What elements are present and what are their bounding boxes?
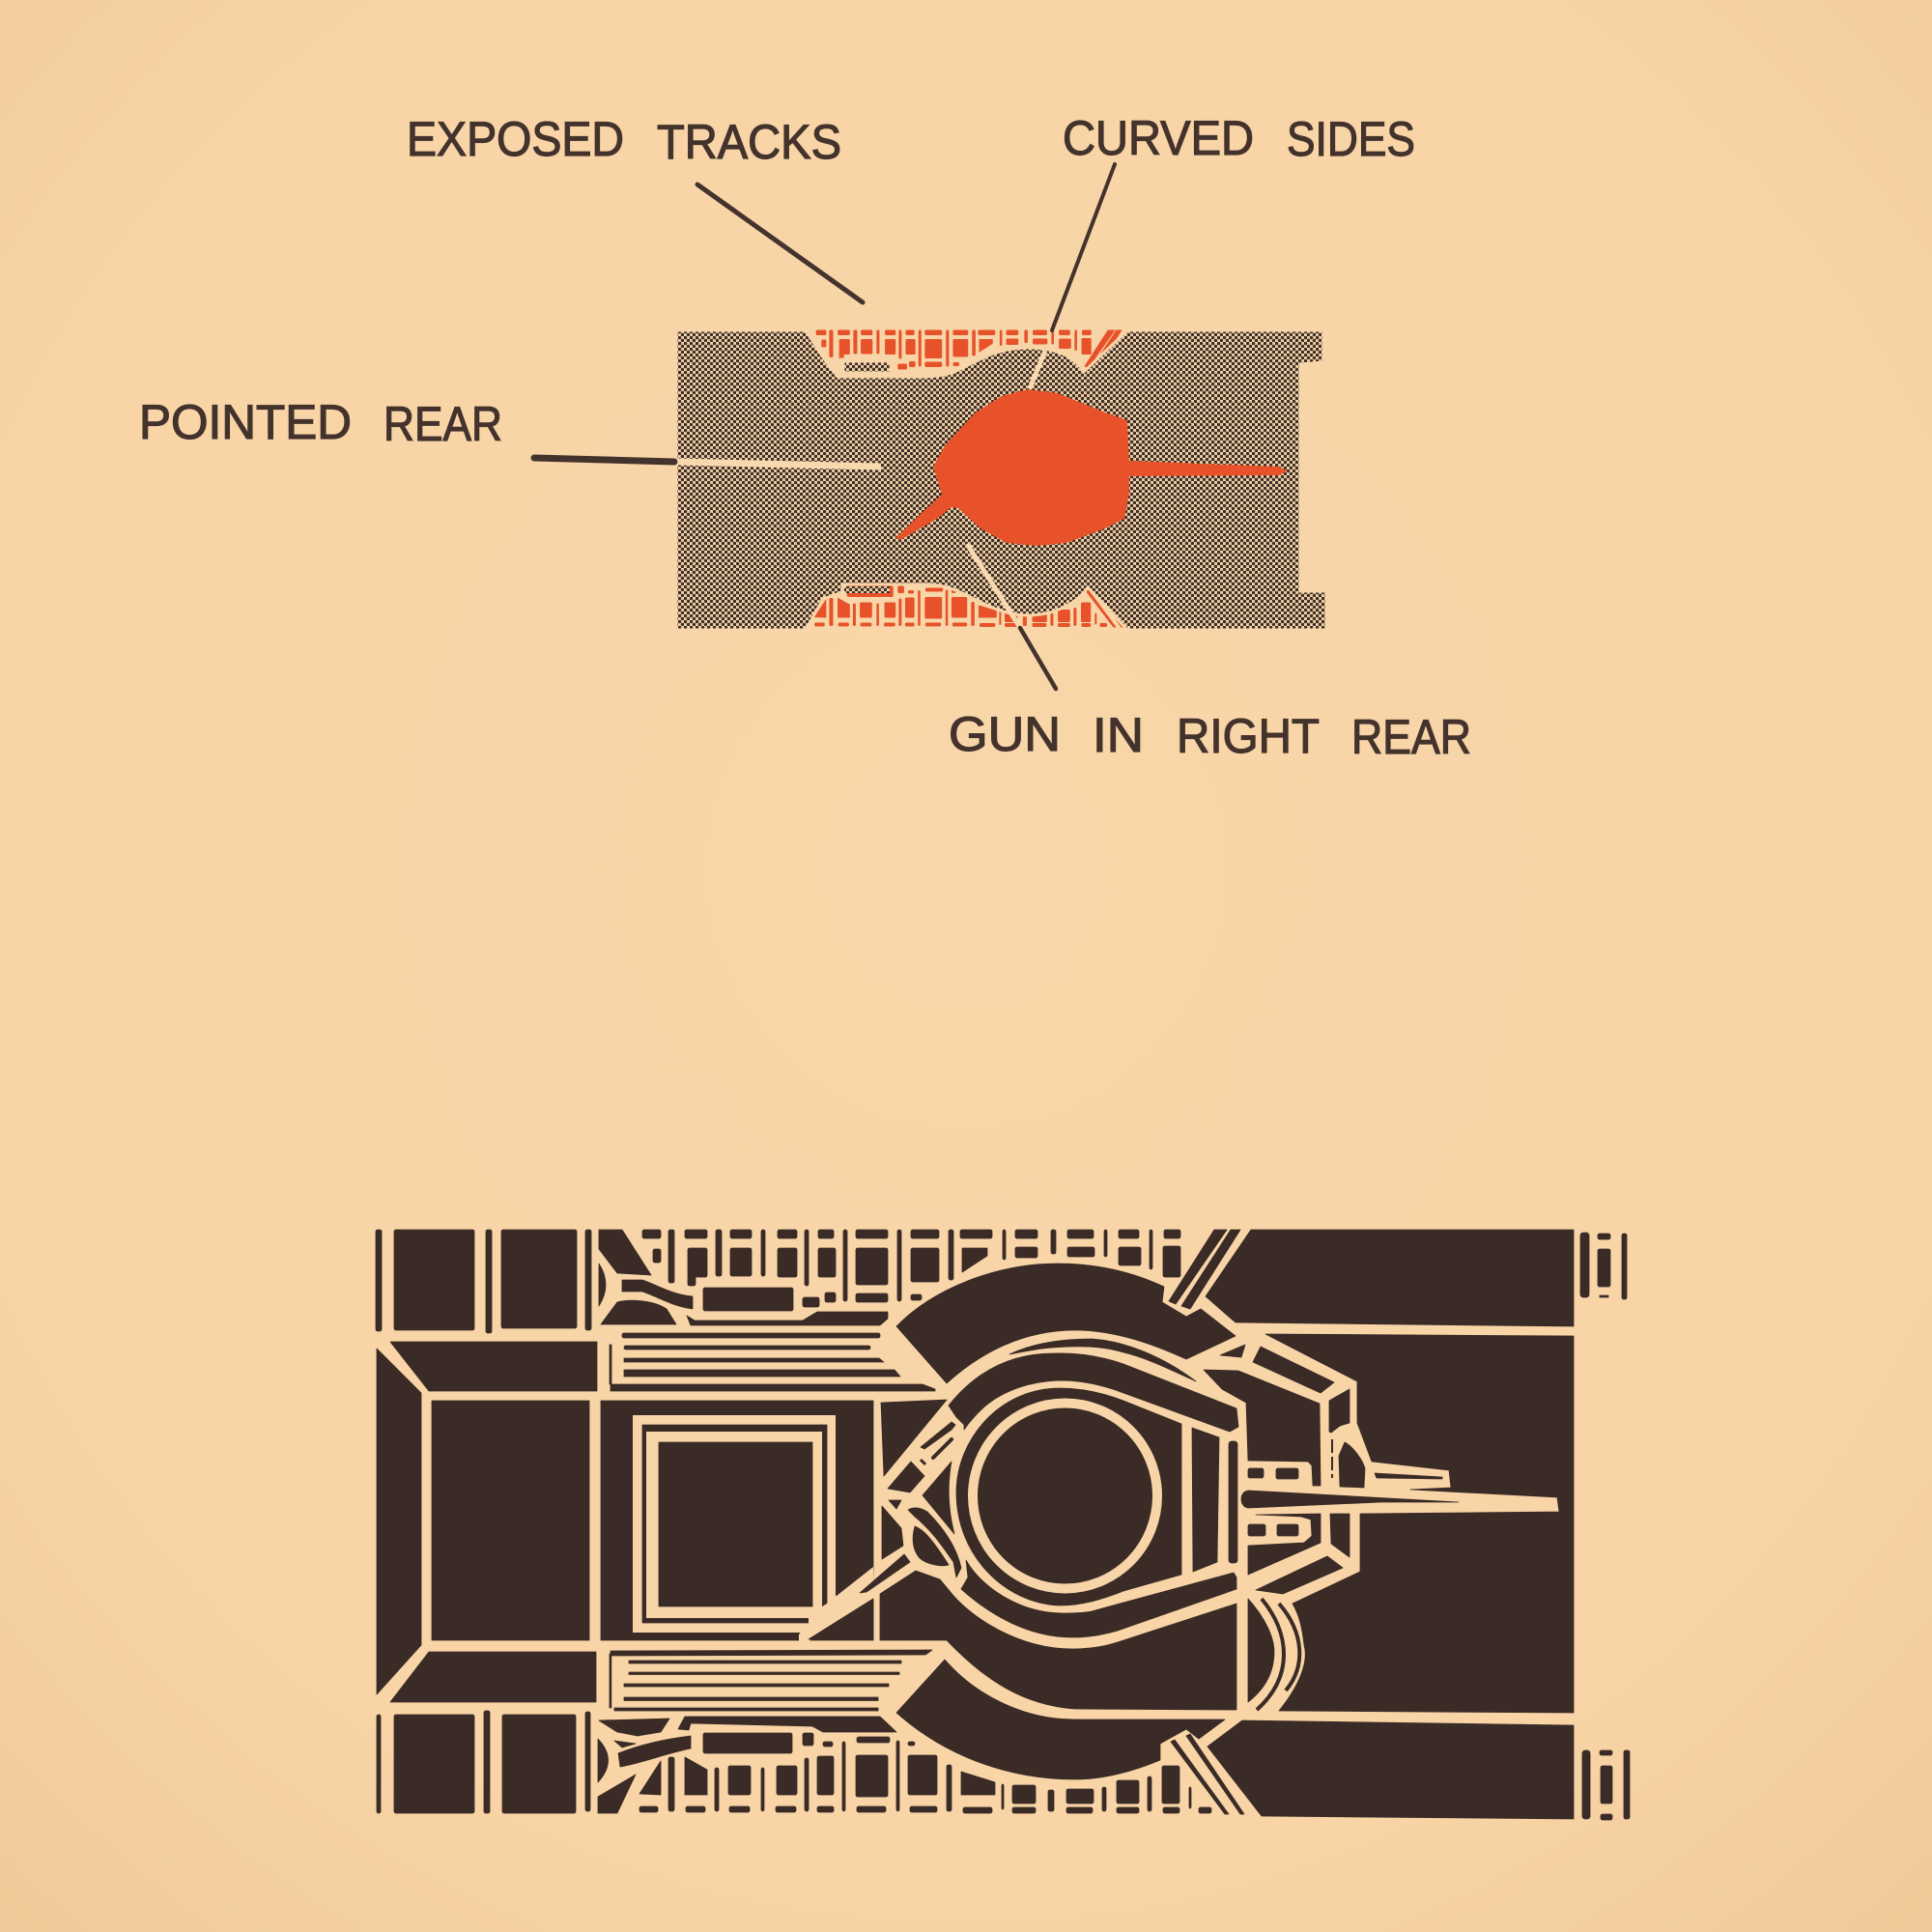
lower hull under turret: [880, 1571, 1236, 1710]
turret top sliver: [1009, 1339, 1196, 1381]
label: curved sides: CURVED: [1063, 111, 1254, 165]
diagram: detailed black tank plan: [376, 1230, 1630, 1820]
turret side panels: [881, 1400, 1237, 1572]
red exposed tracks, bottom: [815, 586, 1123, 627]
diagram: simplified tank with red highlights: [676, 330, 1326, 630]
turret lower band: [961, 1560, 1236, 1637]
halftone hull: [676, 330, 1326, 630]
pale guide lines on hull: [676, 351, 1045, 626]
cupola ring: [973, 1403, 1157, 1588]
engine vent stripes, bottom: [610, 1650, 932, 1711]
top track: [376, 1230, 1240, 1333]
label: exposed tracks: [407, 112, 841, 169]
label: gun in right rear: GUN: [949, 707, 1061, 761]
engine vent stripes, top: [610, 1333, 935, 1391]
vision ports and small turret pieces: [809, 1422, 961, 1639]
right hull plates: [1206, 1230, 1574, 1819]
label: gun in right rear: IN: [1093, 708, 1144, 762]
bottom track: [377, 1711, 1244, 1814]
front hull plates: [377, 1342, 597, 1702]
rear track ends: [1580, 1233, 1630, 1820]
pointer lines: [534, 164, 1115, 689]
turret crescent, bottom fender: [896, 1660, 1225, 1779]
label: gun in right rear: [949, 707, 1471, 764]
engine deck pieces and gun: [1204, 1345, 1459, 1710]
red exposed tracks, top: [816, 330, 1122, 371]
label: exposed tracks: EXPOSED: [407, 112, 624, 166]
turret crescent, top fender: [896, 1264, 1236, 1383]
turret inner disc: [956, 1388, 1181, 1605]
label: exposed tracks: TRACKS: [657, 115, 841, 169]
label: pointed rear: [139, 395, 502, 451]
label: curved sides: [1063, 111, 1415, 166]
label: gun in right rear: REAR: [1351, 710, 1471, 764]
engine hatch panel with frame: [601, 1401, 874, 1641]
label: pointed rear: POINTED: [139, 395, 352, 449]
turret outer band: [949, 1353, 1238, 1432]
label: pointed rear: REAR: [384, 397, 502, 451]
label: curved sides: SIDES: [1287, 112, 1415, 166]
label: gun in right rear: RIGHT: [1177, 709, 1320, 763]
red turret and gun: [895, 389, 1288, 546]
